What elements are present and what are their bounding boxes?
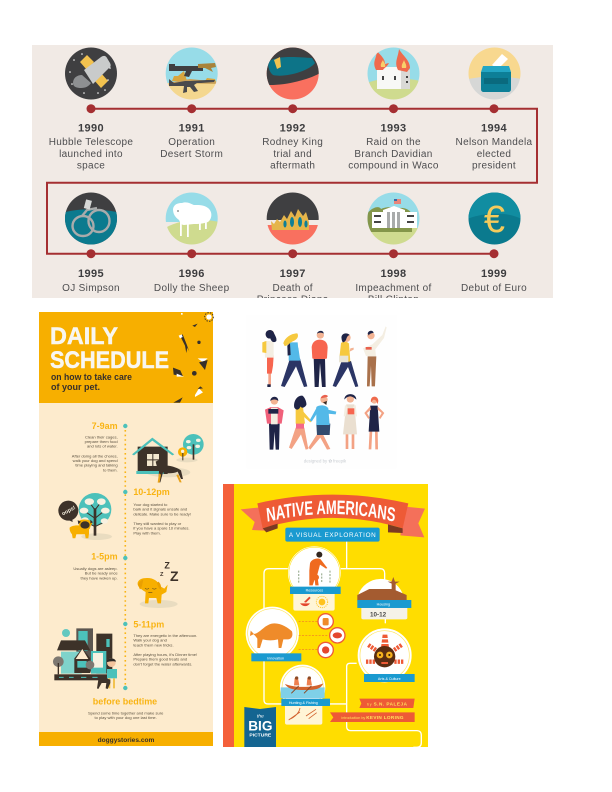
entry 1995 [62, 270, 119, 293]
block: 10-12pm: They still wanted to play or [133, 521, 182, 526]
header confetti icons [173, 313, 213, 403]
header band [39, 312, 213, 403]
entry 1993: Branch Davidian [354, 149, 433, 160]
entry 1994: president [472, 161, 516, 172]
designed by freepik credit: designed by ✿ freepik [304, 458, 347, 463]
block: 5-11pm: teach them new tricks. [133, 642, 174, 647]
panel: daily schedule [39, 312, 213, 746]
block: before bedtime and closing note: before bedtime [93, 696, 157, 706]
person 4 [333, 333, 358, 387]
node: Arts and Culture: Arts & Culture [378, 677, 401, 681]
icon: sleeping dog: Z [164, 560, 170, 570]
entry 1998: Bill Clinton [368, 294, 419, 306]
entry 1996 [154, 270, 229, 293]
icon: Waco compound fire [367, 47, 421, 101]
illustration: group of flat people [247, 315, 397, 468]
entry 1994: 1994 [481, 123, 508, 135]
person 7 [289, 396, 312, 450]
icon: ballot box [468, 47, 522, 101]
title: DAILY [50, 323, 118, 350]
node: Resources: Resources [306, 589, 323, 593]
connector lines [264, 538, 421, 747]
entry 1996: Dolly the Sheep [154, 283, 230, 294]
subtitle tag: A VISUAL EXPLORATION [289, 532, 376, 539]
icon: police cap [266, 47, 320, 100]
block: 7-9am: walk your dog and spend [73, 458, 118, 463]
node: Housing: Housing [377, 602, 390, 606]
subtitle: of your pet. [51, 382, 100, 392]
entry 1990 [49, 123, 133, 172]
entry 1991 [161, 124, 222, 157]
orange spine [223, 484, 234, 747]
block: 5-11pm: They are energetic in the afternoon. [133, 633, 197, 638]
entry 1991: 1991 [179, 123, 205, 135]
block: 1-5pm [73, 551, 118, 581]
entry 1990: launched into [59, 149, 123, 160]
block: 7-9am: prepare them food [85, 439, 118, 444]
innovation icons [299, 614, 345, 658]
person 3 [312, 331, 328, 387]
icon: house with dog [132, 438, 190, 483]
icon: trees at house [176, 434, 204, 462]
block: 10-12pm: 10-12pm [133, 487, 170, 497]
entry 1993: compound in Waco [348, 161, 439, 172]
icon: city with boy walking dog [53, 628, 117, 689]
entry 1993 [348, 123, 439, 172]
person 9 [343, 394, 357, 449]
node: Hunting and Fishing: Hunting & Fishing [289, 701, 318, 705]
entry 1997 [258, 270, 328, 298]
person 10 [364, 397, 384, 449]
entry 1991: Operation [168, 137, 215, 148]
title: SCHEDULE [50, 347, 169, 374]
subtitle [51, 372, 132, 392]
block: 5-11pm: Prepare them good treats and [133, 657, 187, 662]
block: 10-12pm: delicate. Make sure to be ready! [133, 511, 191, 516]
footer band [39, 732, 213, 746]
icon: euro coin: € [484, 199, 505, 241]
person 1 [262, 330, 276, 387]
The Big Picture badge: BIG [248, 719, 272, 734]
entry 1997: Death of [272, 283, 313, 294]
entry 1995: 1995 [78, 268, 104, 280]
block: 7-9am: After doing all the chores, [72, 453, 118, 458]
ribbon title banner: NATIVE AMERICANS [266, 500, 396, 522]
entry 1992 [263, 124, 322, 168]
entry 1992: aftermath [270, 161, 315, 172]
entry 1994 [456, 123, 533, 172]
person 6 [265, 397, 284, 450]
ribbon title banner [240, 494, 425, 538]
timeline dots [86, 104, 498, 258]
entry 1997: Princess Diana [257, 294, 329, 306]
entry 1990: 1990 [78, 123, 104, 135]
icon: Princess Diana tiara [266, 192, 320, 247]
block: before bedtime and closing note: Spend some time together and make sure [88, 710, 164, 715]
icon: sleeping dog [138, 560, 179, 608]
icon: tree with barking pug: oops! [61, 505, 77, 517]
block: before bedtime and closing note: to play with your dog one last time. [95, 715, 157, 720]
block: before bedtime and closing note [88, 696, 164, 720]
entry 1990: Hubble Telescope [49, 137, 133, 148]
timeline nodes [123, 424, 128, 690]
subtitle tag [285, 528, 380, 542]
person 8 [308, 395, 336, 450]
block: 1-5pm: 1-5pm [91, 551, 118, 561]
icon: sleeping dog: Z [160, 572, 164, 578]
block: 5-11pm [133, 619, 197, 666]
The Big Picture badge: the [257, 714, 264, 720]
block: 10-12pm last line: Play with them. [133, 531, 161, 536]
entry 1998: Impeachment of [355, 283, 432, 294]
block: 7-9am: Clean their cages, [85, 434, 118, 439]
block: 10-12pm: bark and it signals unsafe and [133, 507, 187, 512]
icon: tree with barking pug [58, 493, 112, 540]
block: 1-5pm: they have woken up. [81, 576, 118, 581]
icon: Dolly the sheep [165, 192, 219, 246]
block: 7-9am: time playing and talking [75, 463, 118, 468]
title [50, 323, 169, 374]
node: Innovation [246, 607, 301, 661]
entry 1998 [356, 270, 432, 298]
author ribbon [359, 699, 415, 708]
entry 1993: 1993 [380, 123, 407, 135]
entry 1992: Rodney King [262, 137, 323, 148]
entry 1997: 1997 [280, 268, 306, 280]
author ribbon: by S.N. PALEJA [367, 701, 408, 706]
collage page [32, 45, 553, 747]
timeline connector [47, 109, 537, 254]
icon: handcuffs [65, 192, 117, 248]
The Big Picture badge [244, 707, 276, 747]
entry 1996: 1996 [179, 268, 205, 280]
panel: 1990s timeline [32, 45, 553, 306]
block: 7-9am: 7-9am [92, 421, 118, 431]
entry 1995: OJ Simpson [62, 283, 120, 294]
block: 1-5pm: But be ready once [85, 571, 118, 576]
person 2 [281, 333, 307, 387]
vertical dotted timeline [124, 430, 126, 688]
entry 1993: Raid on the [366, 137, 421, 148]
node: Innovation: Innovation [267, 656, 284, 660]
entry 1990: space [77, 161, 105, 172]
node: Arts and Culture [358, 629, 415, 682]
node: Housing [357, 577, 411, 619]
block: 1-5pm: Usually dogs are asleep. [73, 566, 118, 571]
entry 1992: trial and [273, 149, 312, 160]
block: 10-12pm: if you have a spare 10 minutes. [133, 526, 190, 531]
entry 1999 [462, 270, 526, 291]
block: 10-12pm [133, 487, 191, 531]
block: 5-11pm: 5-11pm [133, 619, 164, 629]
subtitle: on how to take care [51, 372, 132, 382]
entry 1994: elected [477, 149, 511, 160]
node: Resources [288, 547, 341, 611]
node: Hunting and Fishing [280, 665, 330, 725]
icon: euro coin [468, 192, 520, 244]
icon: White House [367, 192, 421, 246]
entry 1998: 1998 [380, 268, 407, 280]
icon: sleeping dog: Z [170, 568, 179, 584]
icon: Desert Storm rifles [165, 47, 220, 101]
entry 1991: Desert Storm [160, 149, 223, 160]
icon: Hubble telescope [65, 47, 117, 100]
introduction ribbon [330, 712, 415, 722]
block: 7-9am: and lots of water. [87, 444, 118, 449]
block: 5-11pm: After playing hours, it's Dinner time! [133, 652, 197, 657]
The Big Picture badge: PICTURE [249, 733, 272, 739]
footer band: doggystories.com [98, 737, 155, 744]
introduction ribbon: introduction by KEVIN LORING [341, 715, 404, 720]
block: 5-11pm: Walk your dog and [133, 638, 167, 643]
entry 1992: 1992 [280, 123, 306, 135]
entry 1999: Debut of Euro [461, 283, 527, 294]
block: 7-9am: to them. [103, 467, 118, 472]
block: 7-9am [72, 421, 118, 472]
panel: Native Americans book cover [223, 484, 428, 747]
block: 5-11pm: don't forget the water afterwards. [133, 661, 192, 666]
node: Housing: 10-12 [370, 612, 387, 619]
entry 1994: Nelson Mandela [456, 137, 533, 148]
block: 10-12pm: Your dog started to [133, 502, 168, 507]
entry 1999: 1999 [481, 268, 507, 280]
person 5 [363, 326, 387, 386]
